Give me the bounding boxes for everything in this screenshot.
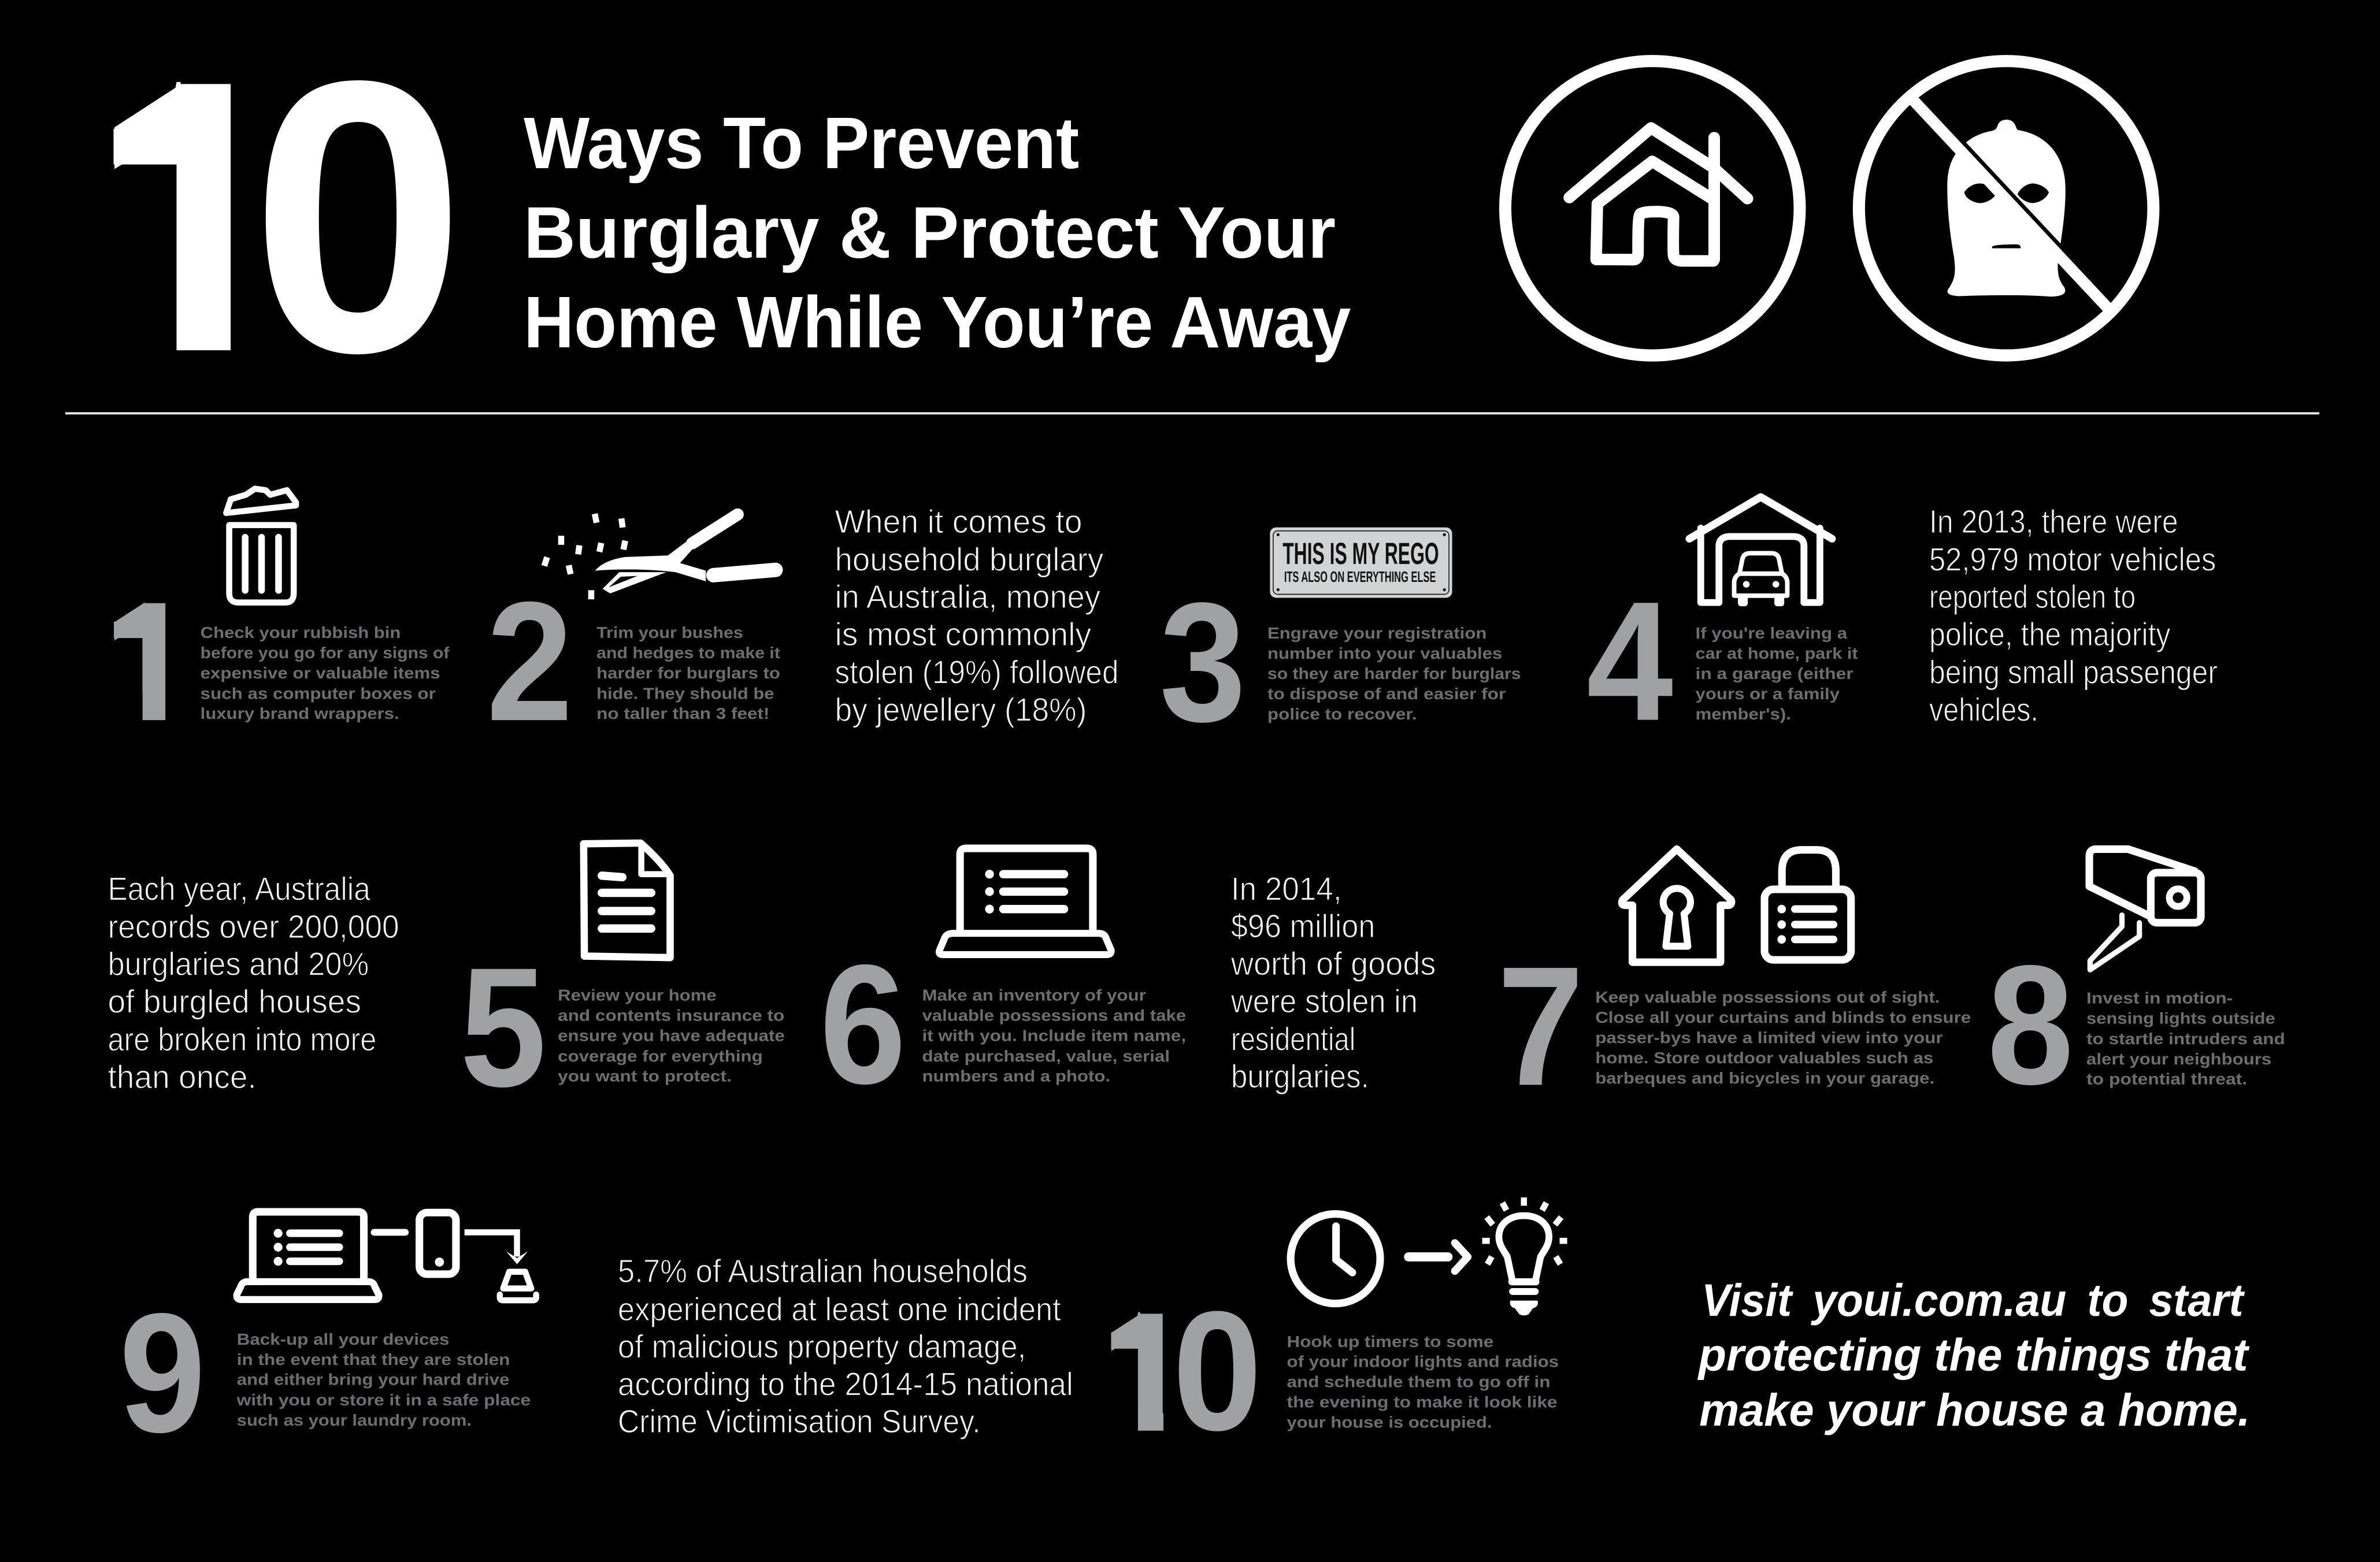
text block: burglaries stat: Each year, Australia bbox=[107, 870, 370, 907]
icon: hedge shears bbox=[542, 513, 776, 599]
tip text 10: of your indoor lights and radios bbox=[1287, 1353, 1559, 1371]
icon: house with keyhole bbox=[1622, 849, 1732, 962]
text block: money stat: by jewellery (18%) bbox=[835, 691, 1087, 728]
number 4: 4 bbox=[1586, 567, 1674, 756]
tip text 2: hide. They should be bbox=[596, 684, 774, 702]
icon: clock bbox=[1291, 1214, 1380, 1304]
tip text 9: in the event that they are stolen bbox=[237, 1350, 510, 1368]
icon: security camera bbox=[2089, 849, 2201, 970]
tip text 8 bbox=[2086, 989, 2285, 1088]
icon: number plate: ITS ALSO ON EVERYTHING ELSE bbox=[1284, 569, 1436, 585]
icon: house in circle bbox=[1505, 61, 1800, 355]
tip text 10: and schedule them to go off in bbox=[1287, 1373, 1550, 1391]
text block: goods stolen stat bbox=[1230, 870, 1436, 1094]
tip text 8: sensing lights outside bbox=[2086, 1010, 2275, 1027]
text block: property damage stat bbox=[618, 1253, 1073, 1439]
header big number 10 bbox=[88, 0, 466, 433]
call to action: make your house a home. bbox=[1699, 1385, 2250, 1435]
text block: money stat: is most commonly bbox=[835, 616, 1092, 652]
tip text 7: Close all your curtains and blinds to ensure bbox=[1595, 1008, 1971, 1026]
tip text 2: no taller than 3 feet! bbox=[596, 704, 770, 722]
tip text 4: member's). bbox=[1696, 705, 1791, 723]
text block: burglaries stat: records over 200,000 bbox=[107, 908, 399, 945]
icon: backup devices bbox=[237, 1212, 536, 1300]
call to action: Visit youi.com.au to start bbox=[1701, 1275, 2245, 1326]
text block: money stat: in Australia, money bbox=[835, 578, 1101, 615]
text block: vehicle stat: reported stolen to bbox=[1929, 578, 2136, 615]
icon: garage with car bbox=[1689, 497, 1832, 606]
icon: laptop inventory bbox=[939, 848, 1111, 955]
text block: property damage stat: experienced at least one incident bbox=[618, 1291, 1061, 1327]
tip text 5 bbox=[558, 986, 785, 1085]
tip text 3: to dispose of and easier for bbox=[1267, 685, 1506, 703]
text block: vehicle stat: 52,979 motor vehicles bbox=[1929, 541, 2216, 577]
tip text 5: coverage for everything bbox=[558, 1047, 763, 1065]
tip text 6: Make an inventory of your bbox=[922, 986, 1146, 1004]
panel: step 1 bbox=[103, 489, 450, 756]
text block: goods stolen stat: $96 million bbox=[1231, 908, 1375, 944]
header big number 10: 1 bbox=[88, 0, 303, 432]
panel: step 6 bbox=[820, 848, 1186, 1119]
tip text 9: such as your laundry room. bbox=[237, 1411, 472, 1429]
tip text 2: and hedges to make it bbox=[596, 644, 780, 662]
tip text 10: your house is occupied. bbox=[1287, 1413, 1492, 1431]
text block: vehicle stat: In 2013, there were bbox=[1929, 503, 2178, 540]
number 3: 3 bbox=[1159, 567, 1246, 757]
tip text 1: luxury brand wrappers. bbox=[201, 704, 399, 722]
text block: property damage stat: according to the 2014-15 national bbox=[618, 1366, 1073, 1403]
title: Home While You’re Away bbox=[524, 281, 1351, 363]
tip text 3 bbox=[1267, 624, 1521, 723]
tip text 9: Back-up all your devices bbox=[237, 1330, 449, 1348]
text block: goods stolen stat: In 2014, bbox=[1231, 870, 1342, 907]
number 8: 8 bbox=[1987, 930, 2074, 1120]
tip text 10 bbox=[1287, 1333, 1559, 1431]
icon: rubbish bin bbox=[226, 489, 296, 603]
tip text 5: Review your home bbox=[558, 986, 717, 1004]
text block: vehicle stat bbox=[1929, 503, 2218, 728]
text block: property damage stat: 5.7% of Australian households bbox=[618, 1253, 1028, 1289]
panel: step 8 bbox=[1987, 849, 2285, 1120]
title: Ways To Prevent bbox=[524, 102, 1079, 184]
tip text 10: the evening to make it look like bbox=[1287, 1393, 1558, 1411]
text block: goods stolen stat: residential bbox=[1231, 1021, 1355, 1057]
text block: burglaries stat: of burgled houses bbox=[107, 984, 361, 1020]
panel: step 9 bbox=[119, 1212, 536, 1468]
tip text 5: ensure you have adequate bbox=[558, 1027, 785, 1045]
tip text 9: with you or store it in a safe place bbox=[236, 1391, 531, 1409]
tip text 1 bbox=[201, 624, 450, 722]
tip text 9 bbox=[236, 1330, 531, 1429]
text block: property damage stat: of malicious property damage, bbox=[618, 1328, 1026, 1364]
text block: money stat: When it comes to bbox=[835, 503, 1083, 540]
number 1: 1 bbox=[103, 567, 197, 756]
panel: step 5 bbox=[460, 843, 785, 1122]
panel: step 10 bbox=[1111, 1197, 1567, 1431]
icon: number plate bbox=[1270, 528, 1452, 598]
tip text 3: police to recover. bbox=[1267, 705, 1417, 723]
number 2: 2 bbox=[487, 567, 573, 756]
tip text 1: such as computer boxes or bbox=[201, 684, 436, 702]
call to action bbox=[1697, 1275, 2250, 1435]
number 9: 9 bbox=[119, 1278, 206, 1468]
tip text 1: Check your rubbish bin bbox=[201, 624, 401, 641]
tip text 3: number into your valuables bbox=[1267, 644, 1502, 662]
panel: step 3 bbox=[1159, 528, 1521, 757]
tip text 7 bbox=[1595, 988, 1971, 1087]
tip text 7: passer-bys have a limited view into your bbox=[1595, 1029, 1943, 1047]
text block: goods stolen stat: were stolen in bbox=[1230, 983, 1418, 1019]
tip text 8: to potential threat. bbox=[2086, 1070, 2247, 1088]
tip text 6: date purchased, value, serial bbox=[922, 1047, 1170, 1065]
tip text 2: harder for burglars to bbox=[596, 664, 780, 682]
tip text 2 bbox=[596, 624, 780, 722]
number 10: 1 bbox=[1100, 1278, 1194, 1467]
tip text 6: numbers and a photo. bbox=[922, 1067, 1110, 1085]
text block: money stat bbox=[835, 503, 1119, 728]
tip text 8: Invest in motion- bbox=[2086, 989, 2233, 1007]
icon: arrow bbox=[1408, 1243, 1468, 1271]
tip text 1: expensive or valuable items bbox=[201, 664, 440, 682]
tip text 4 bbox=[1696, 624, 1858, 723]
tip text 9: and either bring your hard drive bbox=[237, 1371, 509, 1389]
text block: burglaries stat: burglaries and 20% bbox=[107, 946, 369, 982]
tip text 6 bbox=[922, 986, 1186, 1085]
panel: step 2 bbox=[487, 513, 780, 756]
number 6: 6 bbox=[820, 930, 906, 1119]
text block: burglaries stat bbox=[107, 870, 399, 1095]
icon: light bulb bbox=[1482, 1197, 1567, 1315]
text block: goods stolen stat: burglaries. bbox=[1231, 1058, 1369, 1094]
tip text 4: in a garage (either bbox=[1696, 665, 1853, 682]
icon: number plate: THIS IS MY REGO bbox=[1282, 537, 1439, 571]
tip text 2: Trim your bushes bbox=[596, 624, 743, 641]
tip text 7: Keep valuable possessions out of sight. bbox=[1595, 988, 1940, 1006]
text block: money stat: household burglary bbox=[835, 541, 1104, 577]
tip text 4: yours or a family bbox=[1696, 685, 1840, 703]
number 5: 5 bbox=[460, 933, 546, 1122]
tip text 5: and contents insurance to bbox=[558, 1007, 784, 1025]
icon: document bbox=[584, 843, 670, 958]
tip text 7: home. Store outdoor valuables such as bbox=[1595, 1049, 1933, 1067]
title bbox=[524, 102, 1351, 363]
tip text 5: you want to protect. bbox=[558, 1067, 732, 1085]
number 7: 7 bbox=[1497, 932, 1584, 1121]
number 10: 0 bbox=[1173, 1277, 1262, 1466]
tip text 6: valuable possessions and take bbox=[922, 1007, 1186, 1025]
tip text 8: alert your neighbours bbox=[2086, 1050, 2271, 1068]
header big number 10: 0 bbox=[250, 1, 466, 433]
tip text 4: If you're leaving a bbox=[1696, 624, 1848, 642]
text block: goods stolen stat: worth of goods bbox=[1230, 945, 1436, 982]
panel: step 4 bbox=[1586, 497, 1858, 756]
text block: burglaries stat: are broken into more bbox=[107, 1021, 376, 1058]
icon: no burglar mask bbox=[1859, 61, 2153, 355]
call to action: protecting the things that bbox=[1697, 1329, 2249, 1380]
text block: vehicle stat: being small passenger bbox=[1929, 654, 2218, 690]
tip text 4: car at home, park it bbox=[1696, 644, 1858, 662]
tip text 10: Hook up timers to some bbox=[1287, 1333, 1493, 1350]
tip text 6: it with you. Include item name, bbox=[922, 1027, 1186, 1045]
text block: vehicle stat: police, the majority bbox=[1929, 616, 2171, 652]
number 1 bbox=[114, 601, 165, 720]
text block: property damage stat: Crime Victimisation Survey. bbox=[618, 1403, 981, 1439]
title: Burglary & Protect Your bbox=[524, 192, 1336, 273]
tip text 8: to startle intruders and bbox=[2086, 1030, 2285, 1048]
text block: vehicle stat: vehicles. bbox=[1929, 691, 2038, 728]
tip text 7: barbeques and bicycles in your garage. bbox=[1595, 1069, 1934, 1087]
text block: money stat: stolen (19%) followed bbox=[835, 654, 1119, 690]
tip text 3: so they are harder for burglars bbox=[1267, 665, 1521, 682]
panel: step 7 bbox=[1497, 849, 1971, 1121]
tip text 3: Engrave your registration bbox=[1267, 624, 1486, 642]
number 10 bbox=[1100, 1277, 1262, 1467]
icon: padlock bbox=[1764, 850, 1851, 960]
text block: burglaries stat: than once. bbox=[107, 1059, 257, 1095]
tip text 1: before you go for any signs of bbox=[201, 644, 450, 662]
